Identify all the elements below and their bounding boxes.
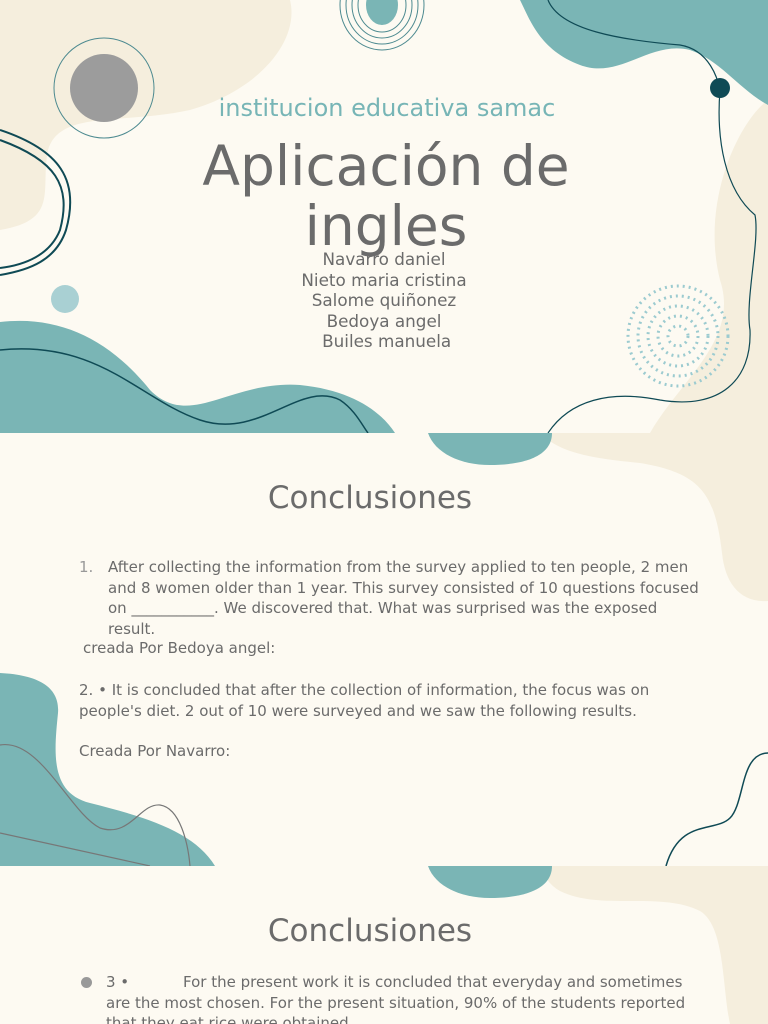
subtitle: school: institucion educativa samac	[219, 94, 555, 122]
conclusion 2: 2. • It is concluded that after the collection of information, the focus was on	[79, 681, 649, 699]
author list: Nieto maria cristina	[301, 270, 467, 290]
decorative shapes slide 1	[0, 0, 768, 433]
main title: ingles	[305, 194, 467, 258]
author list: Navarro daniel	[322, 249, 446, 269]
slide 2: conclusiones: and 8 women older than 1 year. This survey consisted of 10 questions focused	[108, 578, 699, 596]
author note 2: Creada Por Navarro:	[79, 742, 230, 760]
author list: Bedoya angel	[327, 310, 441, 330]
conclusion 3	[81, 973, 685, 1024]
decorative shapes slide 3	[428, 866, 768, 1024]
slide 2: conclusiones: After collecting the information from the survey applied to ten people, 2 men	[108, 558, 688, 576]
conclusion 2	[79, 681, 649, 720]
slide 2: conclusiones: on ___________. We discovered that. What was surprised was the exposed	[108, 599, 657, 617]
author list: Builes manuela	[322, 331, 451, 351]
main title: Aplicación de	[202, 134, 570, 198]
slide 2: conclusiones	[0, 433, 768, 866]
slide 1: title	[0, 0, 768, 433]
author note 1: creada Por Bedoya angel:	[83, 639, 275, 657]
conclusion 2: people's diet. 2 out of 10 were surveyed and we saw the following results.	[79, 702, 637, 720]
slide 3: conclusiones: For the present work it is concluded that everyday and sometimes	[183, 973, 682, 991]
slide 2: conclusiones: result.	[108, 620, 155, 638]
heading: Conclusiones	[268, 913, 472, 949]
heading: Conclusiones	[268, 480, 472, 516]
decorative shapes slide 2	[0, 433, 768, 866]
slide 3: conclusiones	[0, 866, 768, 1024]
conclusion 1	[79, 558, 699, 638]
slide 3: conclusiones: are the most chosen. For the present situation, 90% of the students reported	[106, 994, 685, 1012]
author list: Salome quiñonez	[312, 290, 456, 310]
slide 3: conclusiones: 3 •	[106, 973, 129, 991]
author list	[301, 249, 467, 351]
main title	[202, 134, 570, 258]
conclusion 1: 1.	[79, 558, 93, 576]
